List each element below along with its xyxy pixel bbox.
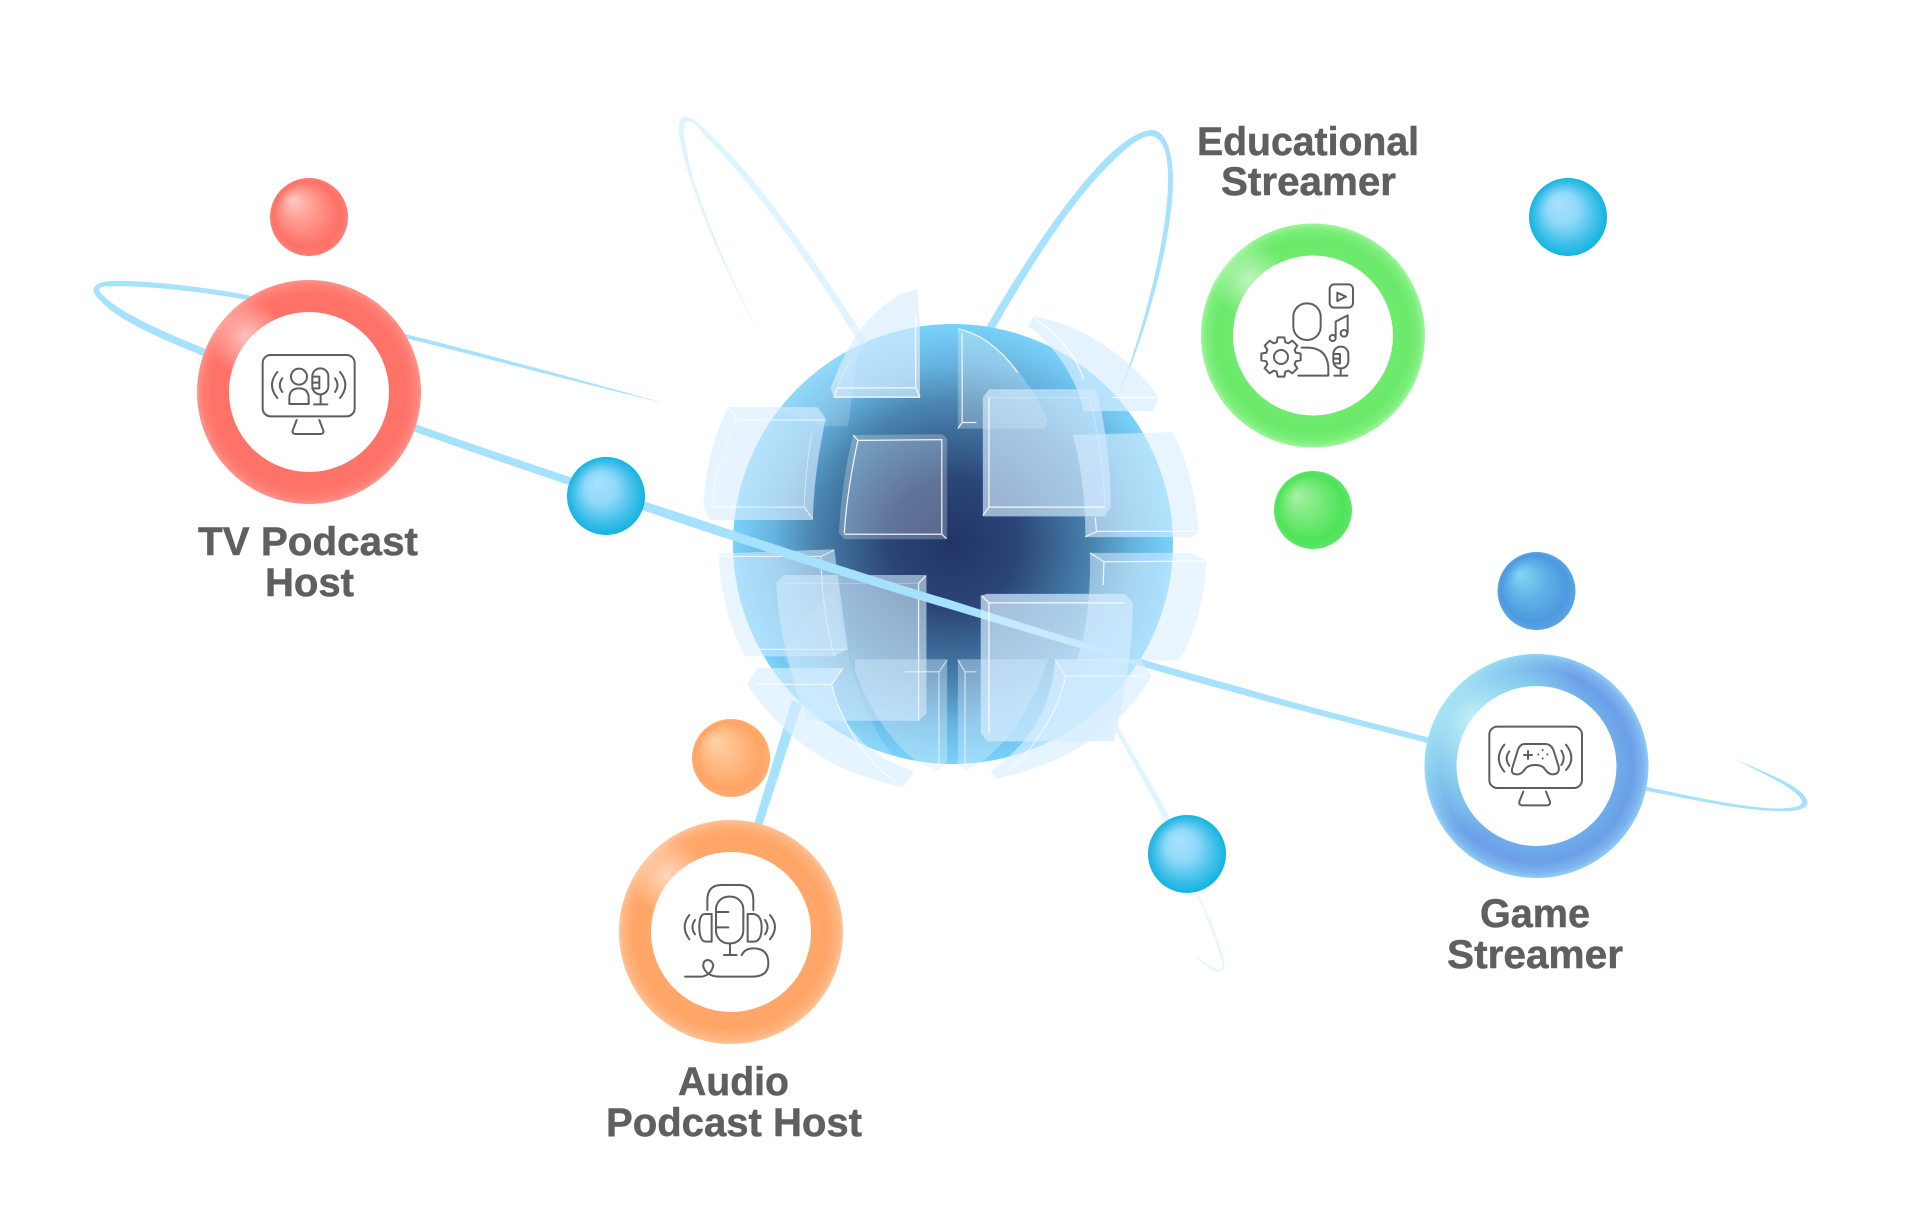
sphere: green <box>1274 471 1352 549</box>
ring: red <box>197 280 421 504</box>
tile middle lower left <box>776 575 926 721</box>
tile top left <box>831 289 920 398</box>
icon: audio podcast microphone <box>685 885 775 977</box>
tile top centre <box>958 329 1048 429</box>
ring: green <box>1201 224 1425 448</box>
tile left <box>703 407 826 520</box>
globe <box>703 289 1206 787</box>
sphere: teal lower right <box>1148 815 1226 893</box>
tile bottom centre right <box>958 659 1048 771</box>
ring: blue <box>1424 654 1648 878</box>
glass tiles <box>703 289 1206 787</box>
tile right lower <box>1076 553 1206 661</box>
label: Educational Streamer: Streamer <box>1221 160 1396 204</box>
sphere: teal on main orbit <box>567 457 645 535</box>
tile centre <box>839 434 947 539</box>
sphere: teal upper right <box>1529 178 1607 256</box>
tile bottom right <box>991 659 1151 779</box>
tile left lower <box>719 549 848 656</box>
label: Educational Streamer <box>1197 120 1419 204</box>
globe core <box>733 324 1173 764</box>
label: Educational Streamer: Educational <box>1197 120 1419 164</box>
sphere: orange <box>692 719 770 797</box>
node: Educational Streamer <box>1197 120 1425 549</box>
label: Game Streamer <box>1447 892 1623 977</box>
ring: orange <box>619 820 843 1044</box>
node: Game Streamer <box>1424 552 1648 977</box>
node: TV Podcast Host <box>197 178 421 605</box>
label: Audio Podcast Host: Podcast Host <box>606 1101 862 1145</box>
icon: game monitor <box>1489 727 1582 805</box>
label: Audio Podcast Host: Audio <box>678 1060 789 1104</box>
tile bottom left <box>747 668 914 787</box>
tile right middle <box>1073 432 1199 537</box>
globe front tiles <box>981 594 1151 779</box>
label: Game Streamer: Game <box>1480 892 1590 936</box>
orbit: main tilted ellipse <box>94 281 1808 811</box>
label: Audio Podcast Host <box>606 1060 862 1145</box>
orbit: upper-right loop <box>976 130 1173 399</box>
node: Audio Podcast Host <box>606 719 862 1145</box>
tile bottom centre left <box>855 659 947 771</box>
orbit: lower-left segment <box>754 700 802 826</box>
tile large lower right <box>981 594 1133 741</box>
tile large upper right <box>983 389 1111 516</box>
orbit: upper-left faint loop <box>679 117 1224 972</box>
sphere: red <box>270 178 348 256</box>
label: TV Podcast Host: TV Podcast <box>198 520 418 564</box>
icon: educational streamer <box>1261 284 1353 377</box>
icon: TV podcast monitor <box>263 355 355 434</box>
tile top right <box>1028 316 1159 411</box>
label: TV Podcast Host: Host <box>265 561 354 605</box>
label: Game Streamer: Streamer <box>1447 933 1623 977</box>
sphere: blue <box>1498 552 1576 630</box>
label: TV Podcast Host <box>198 520 418 605</box>
